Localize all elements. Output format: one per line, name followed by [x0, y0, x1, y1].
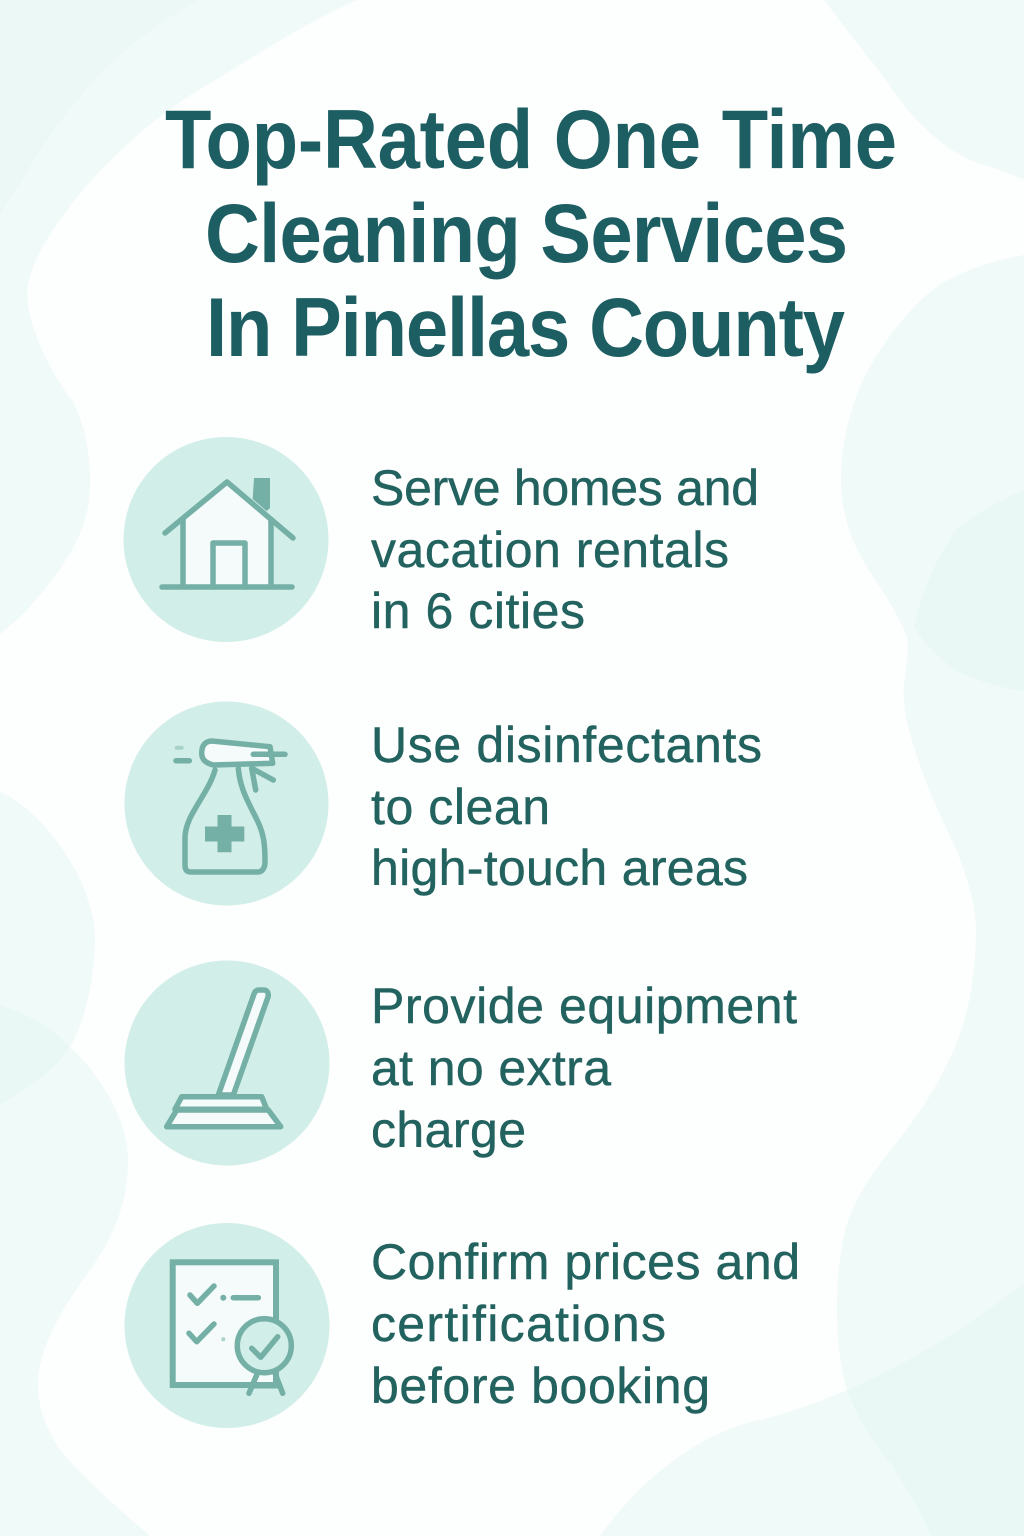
icon: house [124, 437, 328, 642]
title: Top-Rated One Time [165, 93, 897, 186]
text: equipment: charge [371, 1102, 526, 1158]
icon: mop [124, 960, 330, 1166]
text: homes and rentals: Serve homes and [371, 460, 759, 516]
text: disinfectants: Use disinfectants [371, 717, 762, 773]
text: homes and rentals [371, 460, 759, 639]
text: equipment: Provide equipment [371, 978, 797, 1034]
icon: spray bottle [124, 702, 328, 906]
item 3: equipment [124, 960, 797, 1166]
title [165, 93, 897, 374]
text: equipment [371, 978, 797, 1158]
item 2: disinfectants [124, 702, 762, 906]
text: prices and certifications [371, 1234, 800, 1414]
text: prices and certifications: certifications [371, 1296, 666, 1352]
icon: checklist with seal [124, 1223, 330, 1428]
text: equipment: at no extra [371, 1040, 611, 1096]
item 1: homes and rentals [124, 437, 759, 642]
title: In Pinellas County [206, 281, 845, 374]
text: disinfectants: high-touch areas [371, 840, 748, 896]
text: homes and rentals: in 6 cities [371, 583, 585, 639]
text: prices and certifications: Confirm prices and [371, 1234, 800, 1290]
text: disinfectants: to clean [371, 779, 550, 835]
text: homes and rentals: vacation rentals [371, 522, 729, 578]
text: disinfectants [371, 717, 762, 896]
title: Cleaning Services [205, 187, 848, 280]
text: prices and certifications: before booking [371, 1358, 710, 1414]
item 4: prices and certifications [124, 1223, 800, 1428]
